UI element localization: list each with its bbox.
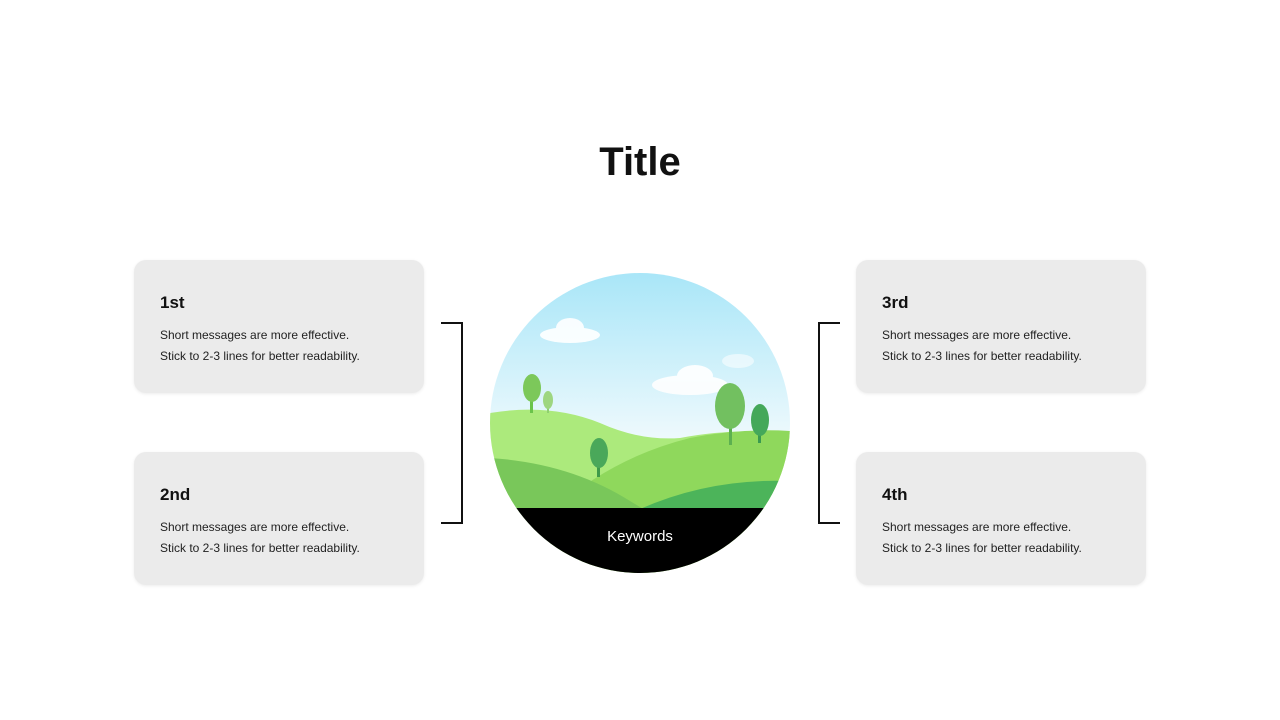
card: 2nd — [134, 452, 424, 585]
keyword label: Keywords — [607, 528, 673, 545]
card: 4th — [856, 452, 1146, 585]
title: Title — [599, 140, 681, 184]
card: 1st: Short messages are more effective. — [160, 328, 349, 342]
trees — [523, 374, 769, 477]
card: 1st — [134, 260, 424, 393]
card: 4th: 4th — [882, 485, 908, 504]
card: 3rd: Short messages are more effective. — [882, 328, 1071, 342]
card: 2nd: Stick to 2-3 lines for better readability. — [160, 541, 360, 555]
bracket left — [441, 322, 463, 524]
card: 3rd: 3rd — [882, 293, 908, 312]
card: 2nd: Short messages are more effective. — [160, 520, 349, 534]
card: 2nd: 2nd — [160, 485, 190, 504]
card: 1st: 1st — [160, 293, 185, 312]
card: 4th: Short messages are more effective. — [882, 520, 1071, 534]
card: 1st: Stick to 2-3 lines for better readability. — [160, 349, 360, 363]
bracket right — [818, 322, 840, 524]
clouds — [540, 318, 754, 395]
circle illustration — [490, 273, 790, 573]
card: 4th: Stick to 2-3 lines for better readability. — [882, 541, 1082, 555]
card: 3rd — [856, 260, 1146, 393]
card: 3rd: Stick to 2-3 lines for better readability. — [882, 349, 1082, 363]
